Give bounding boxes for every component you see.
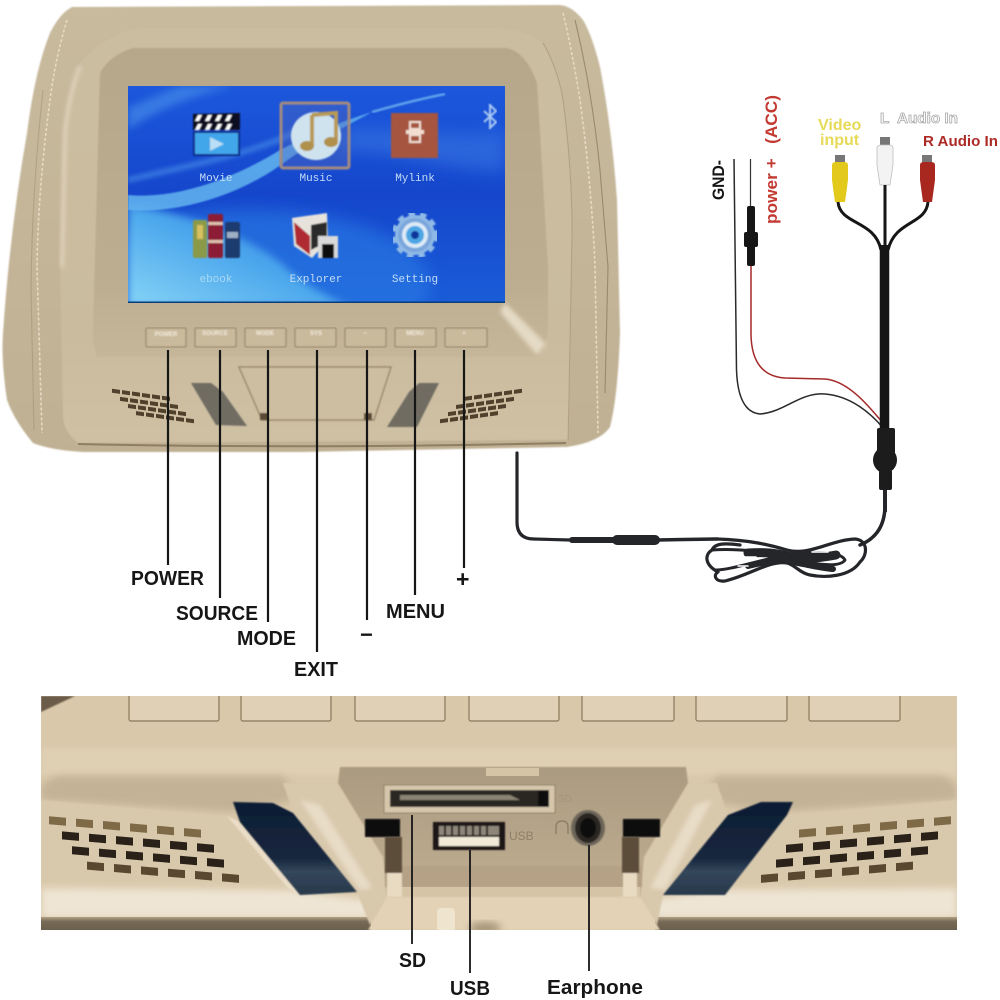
label: EXIT: EXIT xyxy=(294,659,338,681)
bezel left highlight xyxy=(62,66,80,267)
flap peg xyxy=(437,908,455,932)
label: SD: SD xyxy=(399,950,426,972)
decorative stitching xyxy=(37,13,598,433)
wall highlight right xyxy=(650,800,712,890)
decorative screen wallpaper xyxy=(128,206,431,302)
icon: movie clapper xyxy=(193,113,240,156)
cable below connector xyxy=(883,490,887,512)
flap shadow xyxy=(469,922,501,934)
earphone jack xyxy=(571,810,605,846)
icon: setting gear xyxy=(395,215,435,255)
port recess xyxy=(338,767,688,897)
shaded band left xyxy=(41,776,300,812)
plate edge right xyxy=(700,816,773,895)
right side wall xyxy=(648,783,724,925)
top shaded corner xyxy=(41,696,75,712)
decorative latch xyxy=(486,768,539,776)
text: Setting: Setting xyxy=(392,274,438,286)
buttons row xyxy=(146,328,487,347)
panel base xyxy=(41,696,957,930)
perforated grill left xyxy=(49,816,239,883)
button: minus xyxy=(345,328,386,347)
wire: GND xyxy=(734,159,884,429)
button: SOURCE: SOURCE xyxy=(202,331,228,337)
dark slot left xyxy=(365,819,400,837)
lower dark band left xyxy=(41,917,371,930)
decorative lighter strip xyxy=(44,752,954,772)
button: MENU xyxy=(395,328,436,347)
callout lines: ports xyxy=(412,815,589,973)
label: POWER: POWER xyxy=(131,568,205,590)
label: power + (ACC): power + (ACC) xyxy=(762,95,781,224)
recess lower shelf xyxy=(385,866,642,887)
USB engraved text: USB xyxy=(509,829,534,843)
button: SOURCE xyxy=(195,328,236,347)
lower dark band right xyxy=(655,917,957,930)
plate edge left xyxy=(228,816,296,892)
label: L Audio In: L Audio In xyxy=(880,110,958,127)
headrest outer upholstery xyxy=(2,5,620,452)
smoked panel right xyxy=(387,383,439,427)
left side wall xyxy=(284,783,373,925)
button: MODE: MODE xyxy=(256,331,274,337)
panel: headrest monitor photo xyxy=(2,5,620,452)
dark glass right xyxy=(663,802,793,895)
button: MENU: MENU xyxy=(406,331,424,337)
recess highlight corner xyxy=(500,303,546,355)
wall highlight left xyxy=(300,800,372,890)
recess lower lip xyxy=(387,887,640,897)
callout lines: buttons xyxy=(168,350,464,652)
label: Video input: input xyxy=(820,132,860,149)
smoked panel left xyxy=(191,383,247,426)
SD card slot xyxy=(384,785,555,813)
left speaker plate xyxy=(45,802,72,804)
yellow RCA connector xyxy=(832,155,848,202)
speaker grill right xyxy=(440,389,522,423)
button: POWER: POWER xyxy=(155,332,178,338)
label: GND-: GND- xyxy=(709,160,728,200)
cable: monitor to connector xyxy=(517,453,885,581)
button: plus xyxy=(445,328,487,347)
label: minus: − xyxy=(360,622,373,647)
text: ebook: ebook xyxy=(199,274,233,286)
inline connector xyxy=(873,428,897,490)
button: SYS xyxy=(295,328,336,347)
panel: ports close-up photo xyxy=(41,692,957,934)
cream area right xyxy=(650,888,957,918)
SD engraved text: SD xyxy=(558,794,572,805)
icon: mylink xyxy=(391,113,438,158)
wire: power red xyxy=(751,266,887,428)
label: R Audio In: R Audio In xyxy=(923,133,998,150)
dark glass left xyxy=(233,802,357,895)
speaker grill left xyxy=(112,389,194,423)
AV cables xyxy=(838,185,928,430)
icon: bluetooth xyxy=(484,105,496,128)
decorative stitching shadow xyxy=(31,20,608,440)
dark slot right xyxy=(623,819,660,837)
latch post left xyxy=(385,837,402,897)
label: MENU: MENU xyxy=(386,601,445,623)
text: Movie: Movie xyxy=(199,173,233,185)
shaded band right xyxy=(700,776,957,812)
text: Music: Music xyxy=(299,173,333,185)
headphone glyph xyxy=(556,821,568,834)
decorative seam at base xyxy=(78,443,566,446)
label: plus: + xyxy=(456,566,469,592)
label: USB: USB xyxy=(450,978,490,1000)
port cover flap xyxy=(239,367,391,420)
front bezel xyxy=(60,28,572,443)
right speaker plate xyxy=(936,801,953,804)
USB port xyxy=(433,822,505,850)
text: Explorer: Explorer xyxy=(290,274,342,286)
red RCA connector xyxy=(920,155,935,202)
button: MODE xyxy=(245,328,286,347)
latch post right xyxy=(622,837,639,897)
white RCA connector xyxy=(877,137,893,185)
button: minus: − xyxy=(363,331,367,337)
perforated grill right xyxy=(761,816,951,883)
fuse holder xyxy=(744,159,758,266)
button: SYS: SYS xyxy=(310,331,322,337)
panel: wiring harness xyxy=(734,137,935,512)
label: MODE: MODE xyxy=(237,628,296,650)
screen recess xyxy=(93,48,548,357)
label: Earphone: Earphone xyxy=(547,977,643,999)
button: POWER xyxy=(146,328,186,347)
label: SOURCE: SOURCE xyxy=(176,603,258,625)
flap xyxy=(368,897,660,930)
text: Mylink: Mylink xyxy=(395,173,435,185)
label: Video input: Video xyxy=(818,117,862,134)
screen xyxy=(128,86,505,303)
icon: explorer xyxy=(292,213,338,258)
icon: music selected xyxy=(281,103,349,168)
button: plus: + xyxy=(462,331,466,337)
cream area left xyxy=(41,888,372,918)
panel buttons xyxy=(128,696,901,722)
icon: ebook xyxy=(193,214,240,258)
